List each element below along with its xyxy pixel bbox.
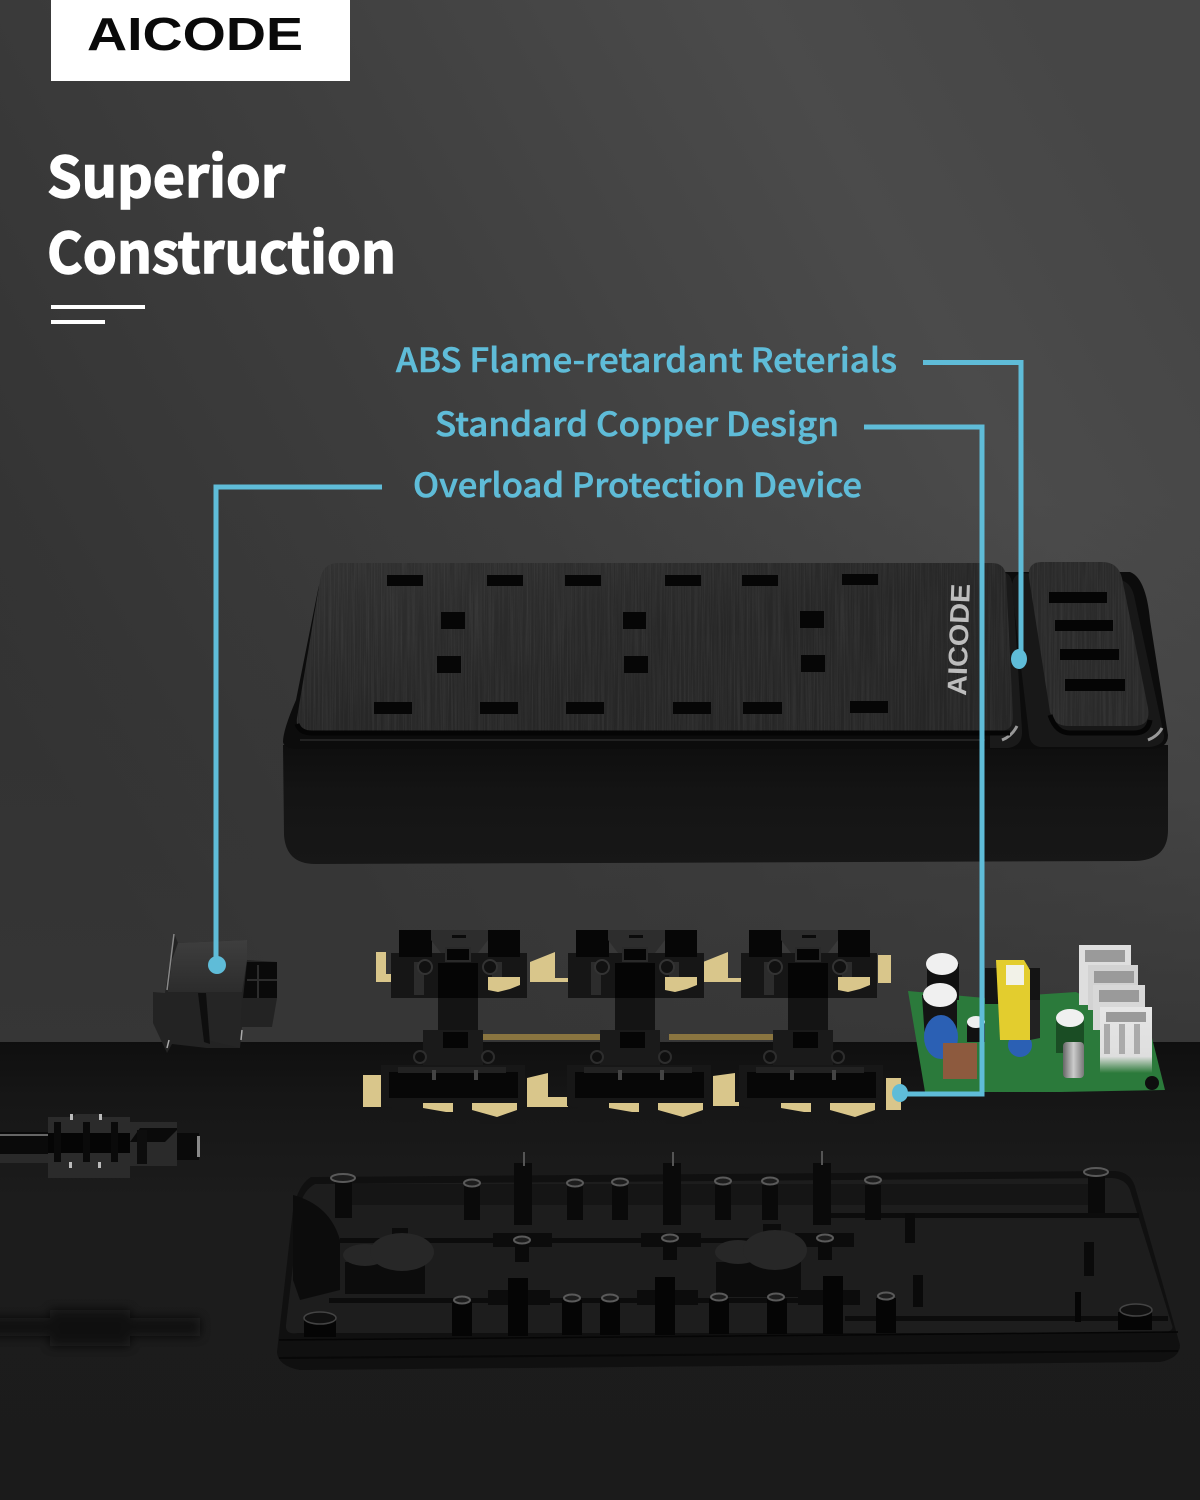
green circuit board <box>908 991 1165 1092</box>
cord shadow <box>0 1310 200 1346</box>
blue varistors <box>924 1015 1032 1059</box>
title underline bars <box>51 305 145 324</box>
upper posts <box>335 1163 1105 1307</box>
lower posts <box>304 1276 1152 1337</box>
device logo: AICODE <box>942 583 976 696</box>
logo box <box>51 0 350 81</box>
corner screw bosses <box>304 1304 1152 1324</box>
ring bosses <box>331 1168 1108 1244</box>
USB module <box>1079 945 1152 1073</box>
lower relay row <box>381 1065 883 1124</box>
title: Superior <box>47 133 286 214</box>
connecting brass bars <box>483 1034 781 1040</box>
tray floor <box>286 1178 1172 1333</box>
ribs <box>329 1213 1168 1321</box>
yellow transformer <box>985 960 1040 1040</box>
power cord plug <box>0 1114 200 1178</box>
overload protection switch <box>153 933 277 1053</box>
tray outer shell <box>277 1171 1180 1370</box>
clover mount left <box>343 1228 434 1294</box>
clover mount right <box>715 1224 807 1297</box>
socket holes <box>374 574 888 714</box>
callout label: overload: Overload Protection Device <box>413 459 862 507</box>
housing body <box>283 745 1168 864</box>
background: dark lower floor <box>0 1042 1200 1500</box>
lower gold contacts <box>363 1073 901 1110</box>
housing rim <box>283 572 1168 749</box>
USB panel <box>1025 560 1155 733</box>
capacitors <box>922 953 1084 1078</box>
background: upper grey wall <box>0 0 1200 1042</box>
lower ring bosses <box>454 1292 894 1304</box>
socket faceplate <box>290 560 1020 740</box>
copper sockets assembly <box>363 930 901 1124</box>
logo wordmark: AICODE <box>87 8 303 60</box>
power strip top housing <box>283 560 1168 864</box>
title <box>47 133 396 290</box>
bottom tray <box>277 1151 1180 1370</box>
callout label: copper: Standard Copper Design <box>435 398 839 446</box>
PCB board <box>908 945 1165 1092</box>
leader: copper design <box>864 427 982 1102</box>
USB ports <box>1049 592 1125 691</box>
upper relay row <box>391 930 877 1066</box>
upper gold contacts <box>376 952 891 983</box>
leader: ABS materials <box>923 362 1027 669</box>
thin pins on top of tall posts <box>523 1151 823 1166</box>
brown filter capacitor <box>943 1043 977 1079</box>
leader: overload protection <box>208 487 382 974</box>
title: Construction <box>47 209 396 290</box>
left cable notch <box>293 1195 340 1300</box>
callout leader lines <box>208 362 1027 1102</box>
callout label: ABS: ABS Flame-retardant Reterials <box>396 334 897 382</box>
